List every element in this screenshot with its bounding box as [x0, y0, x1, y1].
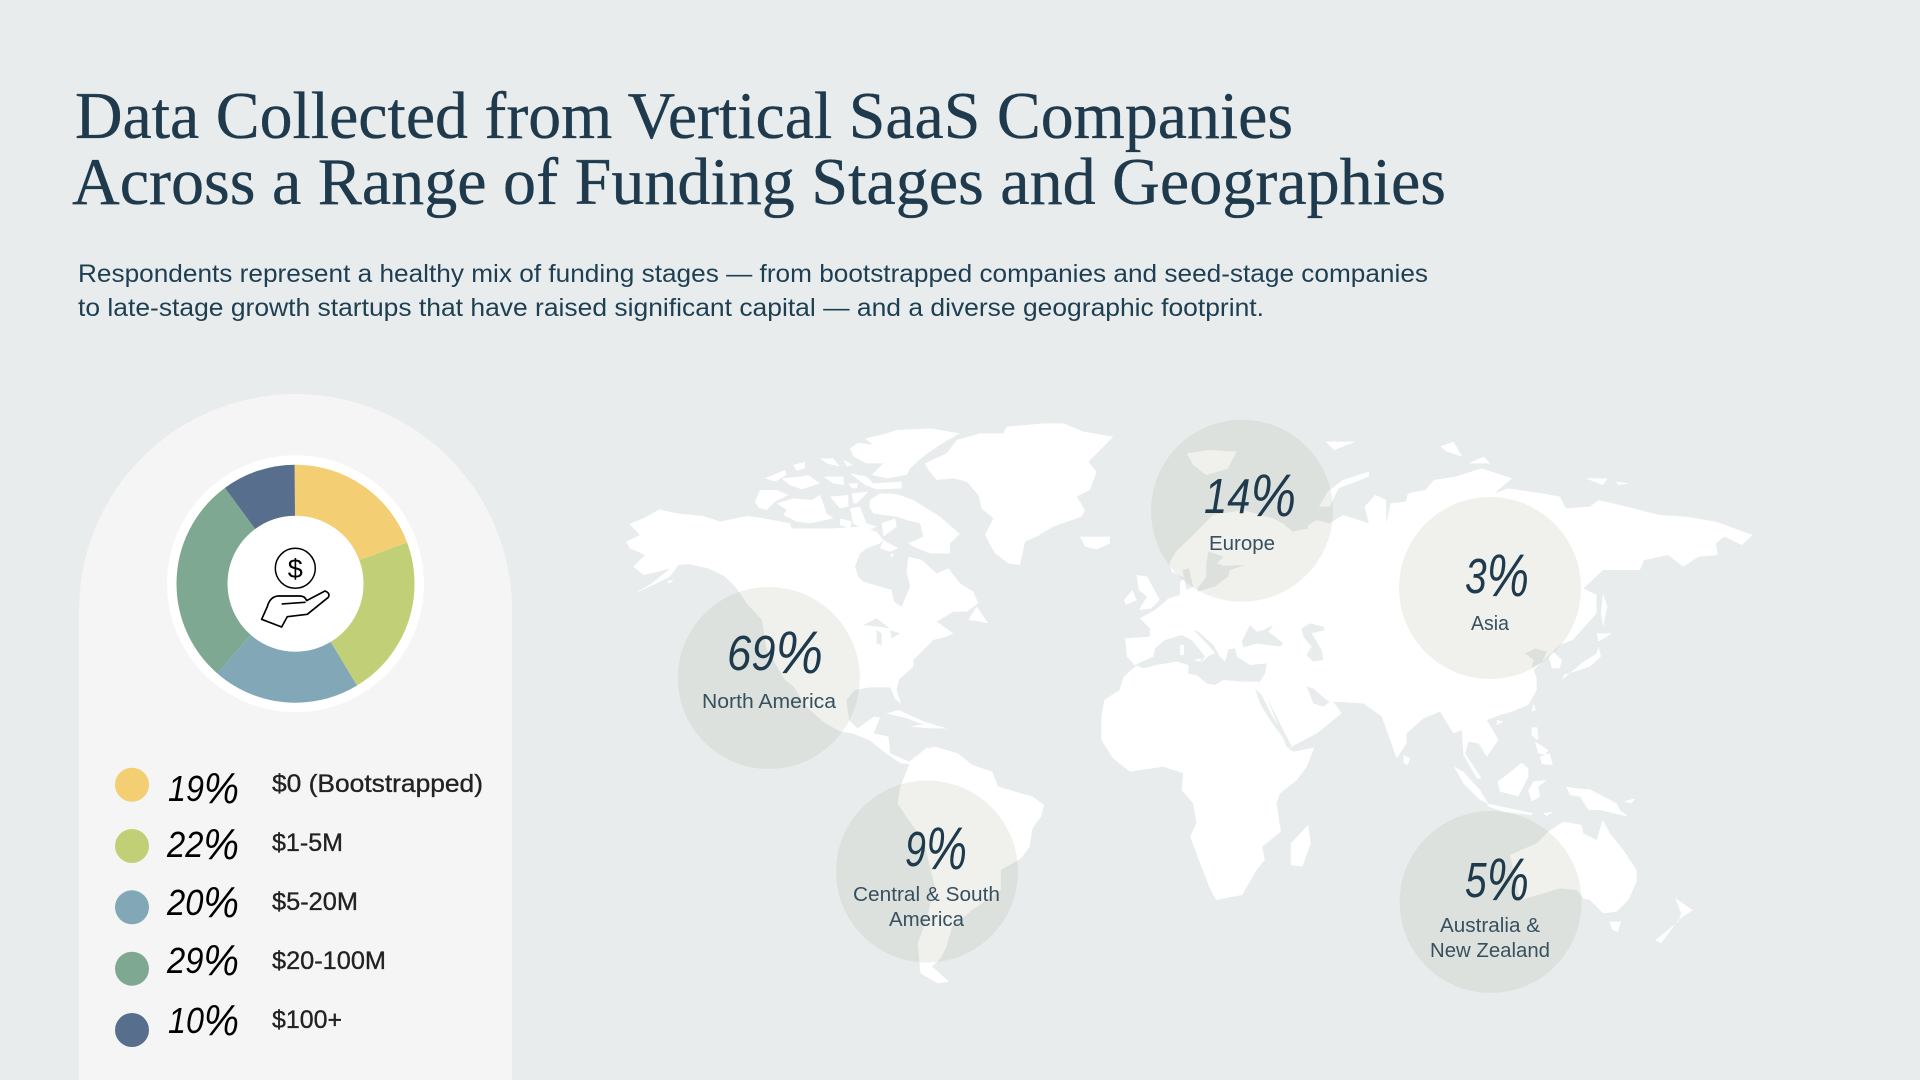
legend row: 100+: $100+	[272, 1006, 342, 1034]
British Isles and Caribbean	[886, 575, 1160, 728]
callout: Asia 3%: Asia	[1471, 613, 1510, 635]
Mediterranean islands	[1180, 645, 1202, 662]
callout: Australia and New Zealand 5%: New Zealand	[1430, 940, 1550, 962]
panel: funding stages	[79, 394, 512, 1080]
legend row: bootstrapped	[115, 764, 483, 813]
legend row: 1-5M: 22	[167, 824, 207, 865]
world map	[626, 423, 1753, 983]
legend row: bootstrapped: $0 (Bootstrapped)	[272, 770, 483, 798]
callout: Europe 14%: 14	[1204, 470, 1258, 524]
icon: hand holding dollar coin	[262, 548, 329, 627]
legend row: 1-5M: %	[203, 820, 239, 869]
Mediterranean, Black Sea, Caspian, Red Sea, Gulf	[1135, 623, 1330, 745]
legend row: 1-5M: $1-5M	[272, 829, 343, 857]
Southeast Asian islands	[1454, 727, 1635, 817]
legend row: 5-20M	[115, 878, 358, 927]
North America and Greenland	[626, 423, 1113, 767]
callout: Asia 3%: 3	[1465, 550, 1492, 604]
title: Across a Range of Funding Stages and Geographies	[72, 145, 1446, 219]
callout: Central and South America 9%	[836, 780, 1018, 962]
North American lakes	[783, 527, 917, 710]
legend row: 1-5M	[115, 820, 343, 869]
callout: Europe 14%: Europe	[1209, 533, 1275, 555]
legend row: 100+: %	[204, 996, 239, 1045]
callout: North America 69%: %	[776, 619, 823, 686]
callout: Australia and New Zealand 5%: 5	[1465, 854, 1492, 908]
intro text: Respondents represent a healthy mix of funding stages — from bootstrapped companies and seed-stage companies	[78, 260, 1428, 288]
intro text: to late-stage growth startups that have raised significant capital — and a diverse geographic footprint.	[78, 294, 1264, 322]
callout: Asia 3%: %	[1487, 542, 1529, 609]
Australia	[1510, 820, 1637, 913]
legend row: 20-100M: %	[203, 936, 239, 985]
donut chart	[167, 455, 424, 712]
callout: North America 69%: 69	[727, 627, 782, 681]
title: Data Collected from Vertical SaaS Companies	[75, 79, 1293, 153]
European and Arctic inland seas	[1182, 522, 1547, 668]
legend row: 5-20M: 20	[167, 882, 207, 923]
legend row: bootstrapped: %	[204, 764, 239, 813]
Eurasia and Africa	[1101, 442, 1753, 900]
legend	[115, 764, 483, 1047]
callout: Central and South America 9%: 9	[905, 823, 932, 877]
callout: Central and South America 9%: %	[926, 815, 967, 882]
legend row: 20-100M	[115, 936, 386, 986]
callout: Australia and New Zealand 5%: Australia &	[1440, 915, 1541, 937]
legend row: 5-20M: $5-20M	[272, 888, 358, 916]
intro text	[78, 260, 1428, 322]
callout: North America 69%: North America	[702, 691, 837, 713]
legend row: 20-100M: 29	[167, 940, 207, 981]
legend row: 5-20M: %	[203, 878, 239, 927]
callout: Europe 14%	[1151, 420, 1333, 602]
callout: Central and South America 9%: America	[889, 909, 965, 931]
callout: Asia 3%	[1399, 497, 1581, 679]
icon: hand holding dollar coin: $	[288, 554, 303, 584]
legend row: 100+: 10	[168, 1000, 208, 1041]
legend row: 100+	[115, 996, 342, 1047]
callout: Europe 14%: %	[1250, 462, 1296, 529]
callout: Central and South America 9%: Central & South	[853, 884, 1000, 906]
legend row: bootstrapped: 19	[168, 768, 208, 809]
callout: Australia and New Zealand 5%	[1400, 811, 1582, 993]
callout: Australia and New Zealand 5%: %	[1487, 846, 1529, 913]
legend row: 20-100M: $20-100M	[272, 947, 386, 975]
callout: North America 69%	[678, 587, 860, 769]
South America, Madagascar, New Zealand	[898, 747, 1693, 983]
title	[72, 79, 1446, 219]
